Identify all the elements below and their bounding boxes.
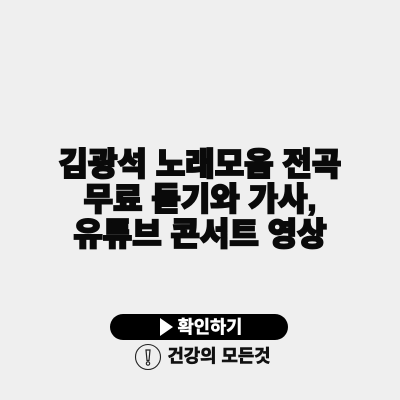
- icon: exclamation circle: [134, 344, 162, 370]
- title: 김광석 노래모음 전곡: [59, 146, 341, 182]
- icon: play triangle: [160, 318, 173, 336]
- button label: 확인하기: [178, 317, 242, 337]
- title: [58, 146, 341, 252]
- title: 무료 듣기와 가사,: [84, 181, 316, 217]
- title: 유튜브 콘서트 영상: [73, 216, 327, 252]
- brand label: 건강의 모든것: [167, 346, 271, 366]
- button: confirm: [110, 314, 288, 340]
